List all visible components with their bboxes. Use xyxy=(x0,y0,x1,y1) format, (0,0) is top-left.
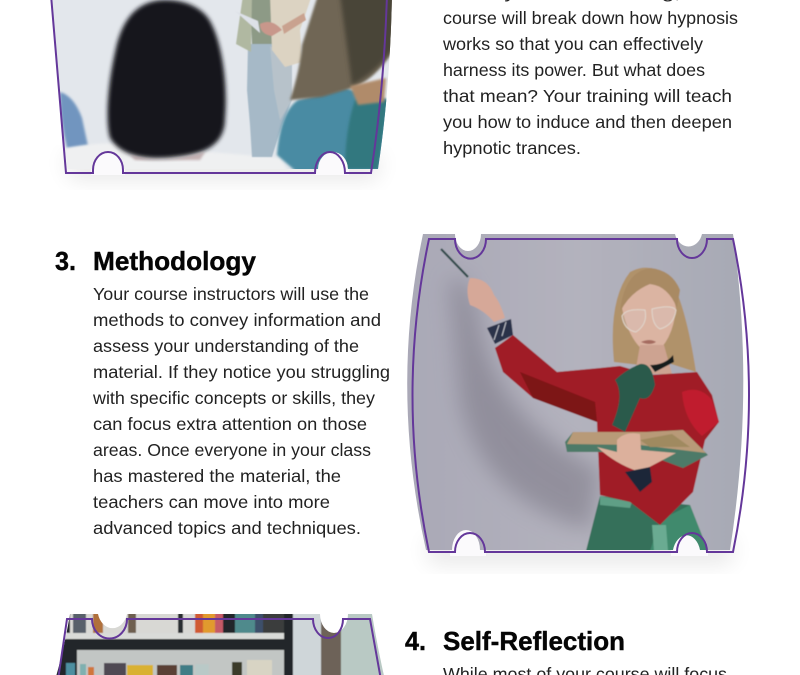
panel: classroom photo xyxy=(40,0,400,180)
heading: step 4 Self-Reflection: 4. xyxy=(405,626,426,656)
decorative purple frame xyxy=(412,239,749,552)
skirt xyxy=(586,496,690,550)
presenter xyxy=(235,0,312,157)
hair front xyxy=(620,268,680,312)
text block: step 2 description: that mean? Your training will teach xyxy=(443,86,732,106)
lower shelf panel xyxy=(77,650,285,675)
text block: step 2 description xyxy=(442,0,738,158)
text block: step 3 description: methods to convey information and xyxy=(93,310,381,330)
text block: step 3 description: assess your understanding of the xyxy=(93,336,359,356)
heading: step 3 Methodology: Methodology xyxy=(93,246,257,276)
blurred dark hair xyxy=(108,0,226,158)
text block: step 3 description: advanced topics and techniques. xyxy=(93,518,361,538)
top row of books xyxy=(69,614,196,634)
text block: step 3 description xyxy=(92,284,390,538)
text block: step 3 description: can focus extra attention on those xyxy=(93,414,367,434)
forearm and hand xyxy=(468,278,505,322)
text block: step 3 description: has mastered the material, the xyxy=(93,466,341,486)
choker xyxy=(650,355,674,372)
text block: step 3 description: material. If they notice you struggling xyxy=(93,362,390,382)
photo: bookshelf xyxy=(50,610,391,675)
text block: step 2 description: works so that you can effectively xyxy=(442,34,703,54)
glasses xyxy=(622,307,676,332)
decorative purple frame xyxy=(58,619,381,675)
hair back xyxy=(613,268,696,372)
woman right: teal top, hair xyxy=(277,88,390,175)
text block: step 2 description: harness its power. But what does xyxy=(443,60,705,80)
book xyxy=(565,430,708,468)
heading: step 3 Methodology: 3. xyxy=(55,246,76,276)
pointer xyxy=(441,249,468,277)
panel: teacher photo xyxy=(395,230,760,564)
lower cuff xyxy=(625,467,652,492)
scarf xyxy=(612,364,655,432)
text block: step 2 description: you how to induce and then deepen xyxy=(443,112,732,132)
decorative purple frame xyxy=(51,0,387,173)
heading: step 4 Self-Reflection: Self-Reflection xyxy=(443,626,625,656)
text block: step 3 description: areas. Once everyone in your class xyxy=(93,440,371,460)
text block: step 3 description: Your course instructors will use the xyxy=(93,284,369,304)
shelf board xyxy=(65,633,285,639)
text block: step 2 description: hypnotic trances. xyxy=(443,138,581,158)
wall shadow xyxy=(450,279,600,530)
face and neck xyxy=(622,284,676,347)
text block: step 3 description: with specific concepts or skills, they xyxy=(92,388,375,408)
text block: step 3 description: teachers can move into more xyxy=(93,492,330,512)
cuff xyxy=(487,319,513,344)
text block: step 2 description: course will break down how hypnosis xyxy=(443,8,738,28)
photo: seminar audience and presenter xyxy=(40,0,400,175)
panel: bookshelf photo xyxy=(50,610,391,675)
photo: teacher pointing with book xyxy=(407,234,744,550)
red blouse xyxy=(495,335,719,525)
right wall, door and plant xyxy=(293,610,321,675)
hand on book xyxy=(597,433,676,472)
